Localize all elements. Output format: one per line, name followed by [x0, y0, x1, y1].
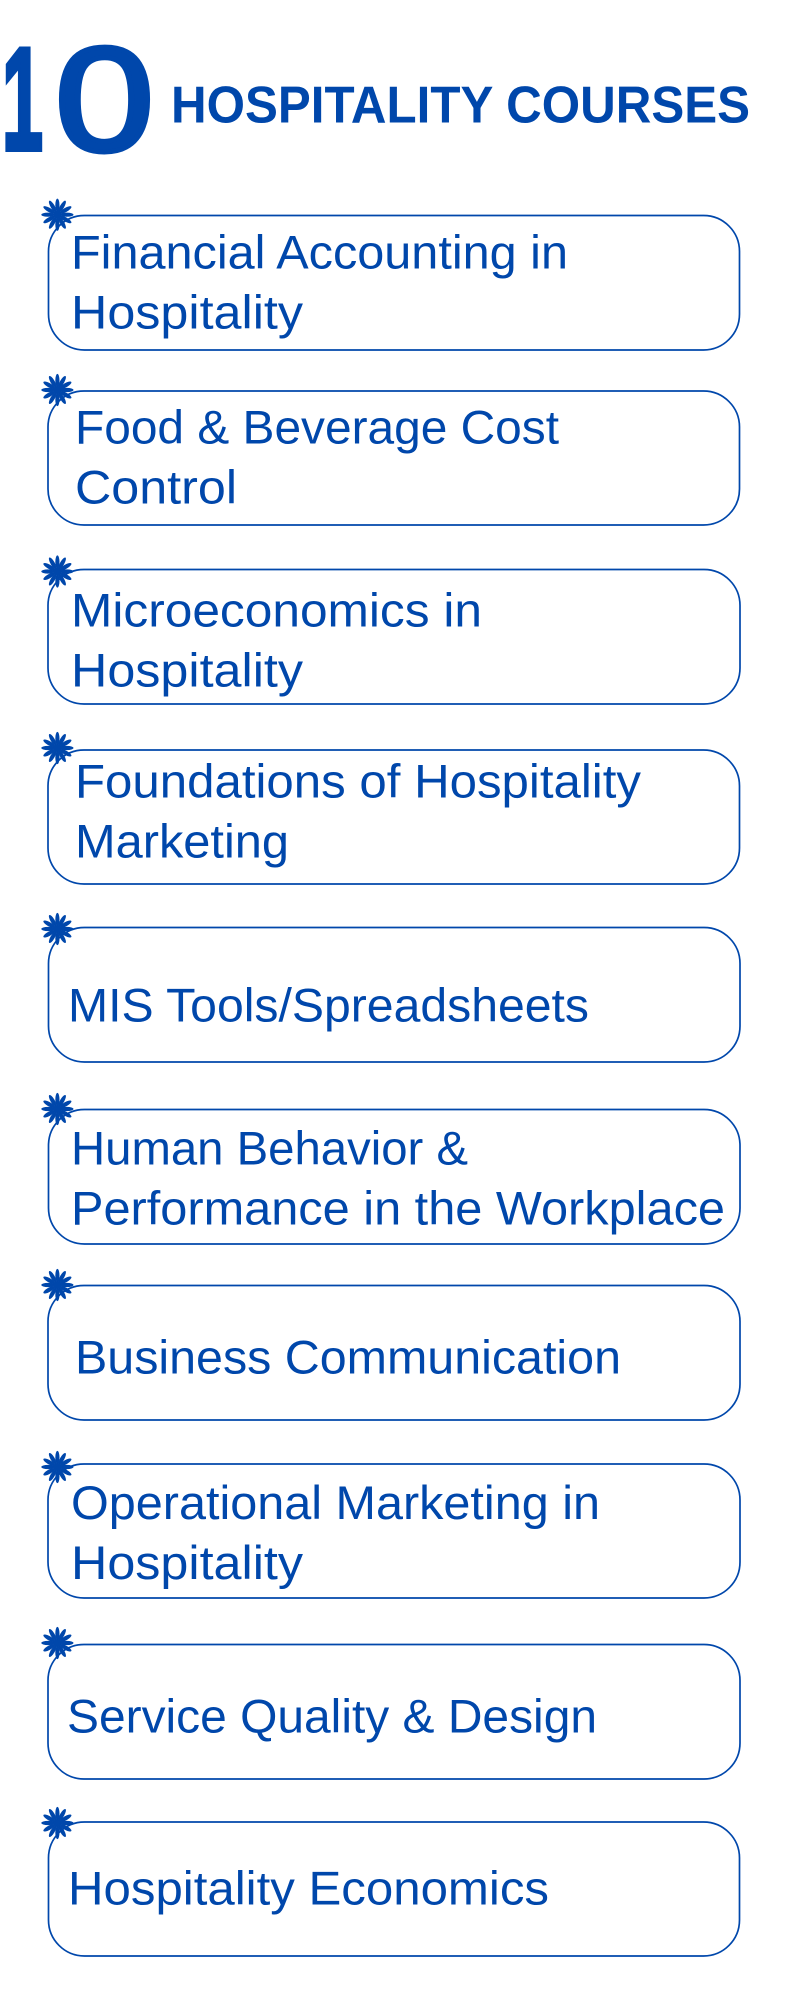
course name: Human Behavior &	[71, 1121, 468, 1174]
course name: Hospitality	[71, 286, 304, 339]
box	[48, 391, 740, 525]
title text: HOSPITALITY COURSES	[171, 77, 750, 135]
icon: flower	[41, 732, 74, 764]
title number: 1	[2, 18, 43, 180]
panel: Business Communication	[41, 1269, 740, 1420]
course name: Foundations of Hospitality	[75, 755, 642, 808]
course name: Service Quality & Design	[67, 1690, 597, 1743]
course name: Hospitality Economics	[68, 1861, 549, 1914]
course name: Performance in the Workplace	[71, 1181, 725, 1234]
course name: Financial Accounting in	[71, 226, 568, 279]
panel: Hospitality Economics	[41, 1807, 740, 1956]
icon: flower	[41, 1627, 74, 1659]
box	[48, 1822, 740, 1956]
icon: flower	[41, 555, 74, 588]
icon: flower	[41, 1451, 74, 1483]
box	[48, 1110, 740, 1244]
course name: Microeconomics in	[71, 584, 482, 637]
box	[48, 1644, 740, 1779]
box	[48, 1464, 740, 1598]
box	[48, 750, 740, 884]
box	[48, 216, 740, 350]
course name: Operational Marketing in	[71, 1476, 600, 1529]
icon: flower	[41, 374, 74, 406]
panel: Microeconomics in Hospitality	[41, 555, 740, 704]
box	[48, 570, 740, 704]
course name: Marketing	[75, 815, 289, 868]
panel: Operational Marketing in Hospitality	[41, 1451, 740, 1598]
course name: Business Communication	[75, 1330, 621, 1383]
title number: 0	[55, 18, 154, 182]
panel: Human Behavior & Performance in the Workplace	[41, 1093, 740, 1244]
icon: flower	[41, 913, 74, 945]
panel: Foundations of Hospitality Marketing	[41, 732, 740, 884]
title number	[2, 18, 154, 182]
course name: Hospitality	[71, 1536, 304, 1589]
course name: Food & Beverage Cost	[75, 401, 559, 454]
box	[48, 928, 740, 1062]
course name: Hospitality	[71, 644, 304, 697]
icon: flower	[41, 1269, 74, 1301]
panel: Financial Accounting in Hospitality	[41, 199, 740, 350]
course name: MIS Tools/Spreadsheets	[68, 979, 589, 1032]
icon: flower	[41, 1093, 74, 1125]
panel: MIS Tools/Spreadsheets	[41, 913, 740, 1062]
title	[2, 18, 750, 182]
icon: flower	[41, 1807, 74, 1839]
panel: Food & Beverage Cost Control	[41, 374, 740, 525]
icon: flower	[41, 199, 74, 231]
box	[48, 1286, 740, 1420]
course name: Control	[75, 461, 237, 514]
panel: Service Quality & Design	[41, 1627, 740, 1779]
